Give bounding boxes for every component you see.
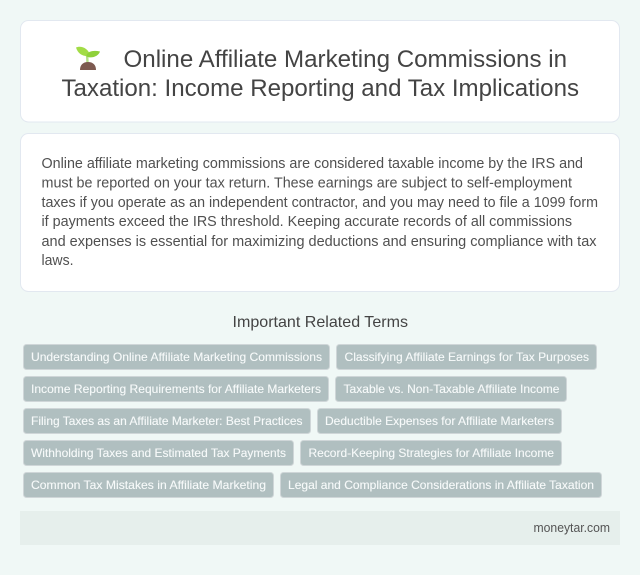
chip xyxy=(300,440,562,466)
panel: related term chips xyxy=(24,344,602,498)
footer source text: moneytar.com xyxy=(534,521,610,535)
chip: Income Reporting Requirements for Affiliate Marketers xyxy=(31,382,321,396)
summary text: if payments exceed the IRS threshold. Keeping accurate records of all commissions xyxy=(42,214,572,230)
chip: Classifying Affiliate Earnings for Tax Purposes xyxy=(344,350,589,364)
chip xyxy=(336,344,596,370)
chip xyxy=(318,408,562,434)
chip: Taxable vs. Non-Taxable Affiliate Income xyxy=(344,382,560,396)
chip: Legal and Compliance Considerations in Affiliate Taxation xyxy=(288,478,594,492)
summary text: must be reported on your tax return. These earnings are subject to self-employment xyxy=(42,176,572,192)
summary text: Online affiliate marketing commissions are considered taxable income by the IRS and xyxy=(42,156,583,172)
chip xyxy=(24,376,328,402)
footer xyxy=(20,511,620,545)
heading: important related terms: Important Related Terms xyxy=(232,314,408,331)
chip xyxy=(24,408,310,434)
summary text: and expenses is essential for maximizing deductions and ensuring compliance with tax xyxy=(42,234,597,250)
chip xyxy=(280,472,602,498)
chip xyxy=(336,376,566,402)
summary text xyxy=(42,156,598,269)
title: Online Affiliate Marketing Commissions in xyxy=(124,46,567,73)
summary text: taxes if you operate as an independent contractor, and you may need to file a 1099 form xyxy=(42,195,598,211)
chip xyxy=(24,344,330,370)
chip: Withholding Taxes and Estimated Tax Payments xyxy=(31,446,286,460)
title xyxy=(62,46,579,102)
chip: Record-Keeping Strategies for Affiliate Income xyxy=(308,446,554,460)
chip: Filing Taxes as an Affiliate Marketer: Best Practices xyxy=(31,414,302,428)
chip: Deductible Expenses for Affiliate Marketers xyxy=(325,414,554,428)
chip: Understanding Online Affiliate Marketing Commissions xyxy=(31,350,322,364)
chip xyxy=(24,472,274,498)
summary text: laws. xyxy=(42,253,74,269)
panel: summary card xyxy=(20,134,620,292)
title: Taxation: Income Reporting and Tax Implications xyxy=(62,75,579,102)
icon: sprout xyxy=(76,47,100,70)
chip xyxy=(24,440,294,466)
chip: Common Tax Mistakes in Affiliate Marketing xyxy=(31,478,266,492)
panel: header card xyxy=(20,20,620,122)
